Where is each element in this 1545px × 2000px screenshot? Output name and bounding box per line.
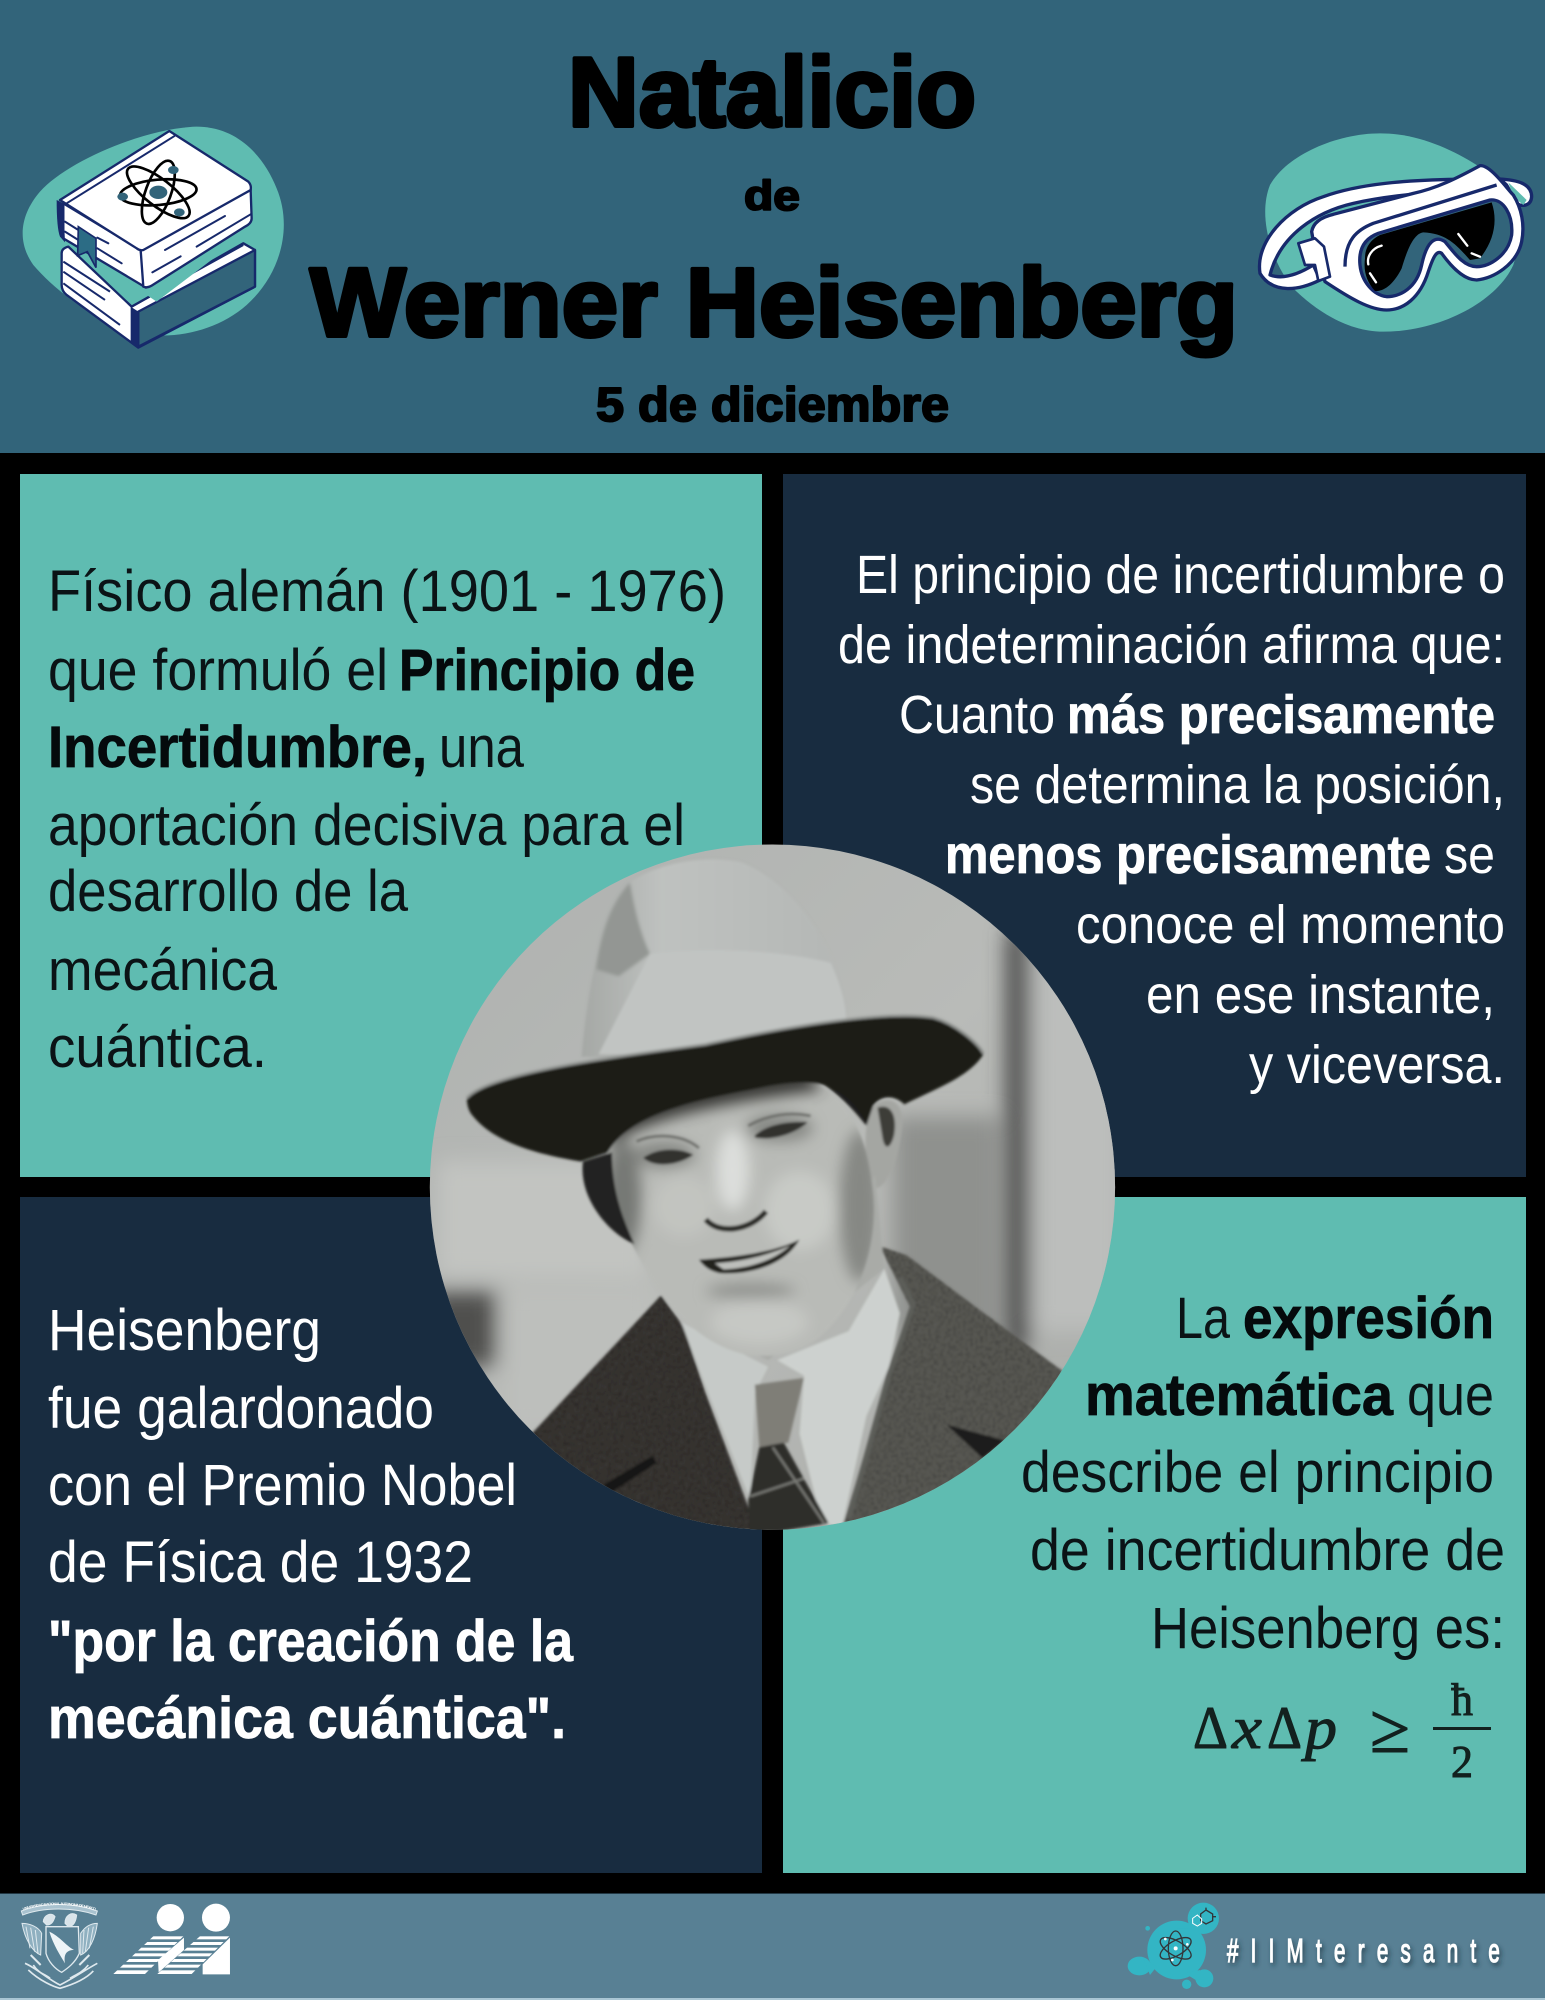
icon: safety goggles (1259, 133, 1532, 332)
hat crown (582, 860, 746, 1056)
date: 5 de diciembre (596, 379, 949, 432)
principle text: se (1444, 825, 1495, 885)
formula: Δ (1267, 1695, 1302, 1761)
hashtag: #IIMteresante (1227, 1932, 1500, 1969)
eyes (643, 1150, 693, 1164)
expression text: expresión (1243, 1286, 1494, 1351)
Nobel text: con el Premio Nobel (48, 1453, 517, 1518)
formula: ħ (1451, 1674, 1473, 1725)
logo: UNAM shield (20, 1902, 98, 1990)
shirt (681, 1322, 768, 1501)
title: Natalicio: Natalicio (568, 37, 976, 147)
biography text: Incertidumbre, (48, 715, 427, 780)
header band (0, 0, 1545, 453)
expression text: describe el principio (1021, 1440, 1494, 1505)
biography text: una (439, 715, 525, 780)
formula (1193, 1674, 1491, 1787)
portrait photo of Heisenberg (420, 840, 1134, 1554)
logo: IIM (110, 1904, 233, 1974)
principle text (838, 545, 1505, 1095)
principle text: más precisamente (1067, 685, 1495, 745)
Nobel text: fue galardonado (48, 1376, 434, 1441)
panel: mathematical expression (783, 1197, 1526, 1873)
principle text: y viceversa. (1249, 1035, 1505, 1095)
principle text: conoce el momento (1076, 895, 1505, 955)
formula: p (1301, 1695, 1337, 1761)
biography text: desarrollo de la (48, 859, 409, 924)
expression text: de incertidumbre de (1030, 1518, 1505, 1583)
coat (532, 1295, 759, 1536)
logo: UNAM shield: UNIVERSIDAD NACIONAL AUTONOMA DE MEXICO (22, 1902, 96, 1910)
neck (764, 1188, 884, 1359)
formula: ≥ (1370, 1691, 1410, 1768)
panel: Nobel prize (20, 1197, 762, 1873)
Nobel text: "por la creación de la (48, 1609, 574, 1674)
Nobel text: Heisenberg (48, 1298, 321, 1363)
biography text: que formuló el (48, 638, 388, 703)
formula: Δ (1193, 1695, 1228, 1761)
title: Werner Heisenberg: Werner Heisenberg (310, 248, 1238, 357)
biography text: mecánica (48, 938, 278, 1003)
formula: 2 (1451, 1736, 1473, 1787)
expression text: que (1407, 1363, 1494, 1428)
ear (865, 1100, 902, 1188)
Nobel text (48, 1298, 574, 1751)
biography text: aportación decisiva para el (48, 793, 685, 858)
tie (755, 1378, 804, 1447)
biography text: Físico alemán (1901 - 1976) (48, 559, 726, 624)
logo: molecule blob (1128, 1903, 1219, 1989)
biography text (48, 559, 726, 1080)
expression text: matemática (1085, 1363, 1394, 1428)
face (606, 1080, 874, 1356)
principle text: menos precisamente (945, 825, 1431, 885)
panel: uncertainty principle (783, 474, 1526, 1177)
hair (582, 1153, 634, 1244)
biography text: Principio de (399, 638, 695, 703)
expression text: La (1176, 1286, 1231, 1351)
mouth (699, 1240, 799, 1273)
expression text: Heisenberg es: (1151, 1596, 1505, 1661)
Nobel text: mecánica cuántica". (48, 1686, 566, 1751)
biography text: cuántica. (48, 1015, 267, 1080)
formula: x (1231, 1695, 1262, 1761)
panel: biography (20, 474, 762, 1177)
footer band (0, 1893, 1545, 2000)
Nobel text: de Física de 1932 (48, 1530, 473, 1595)
principle text: en ese instante, (1146, 965, 1495, 1025)
principle text: Cuanto (899, 685, 1055, 745)
icon: stacked science books (23, 127, 284, 348)
title: de: de (744, 172, 800, 219)
expression text (1021, 1286, 1505, 1661)
hat brim (467, 1017, 983, 1161)
